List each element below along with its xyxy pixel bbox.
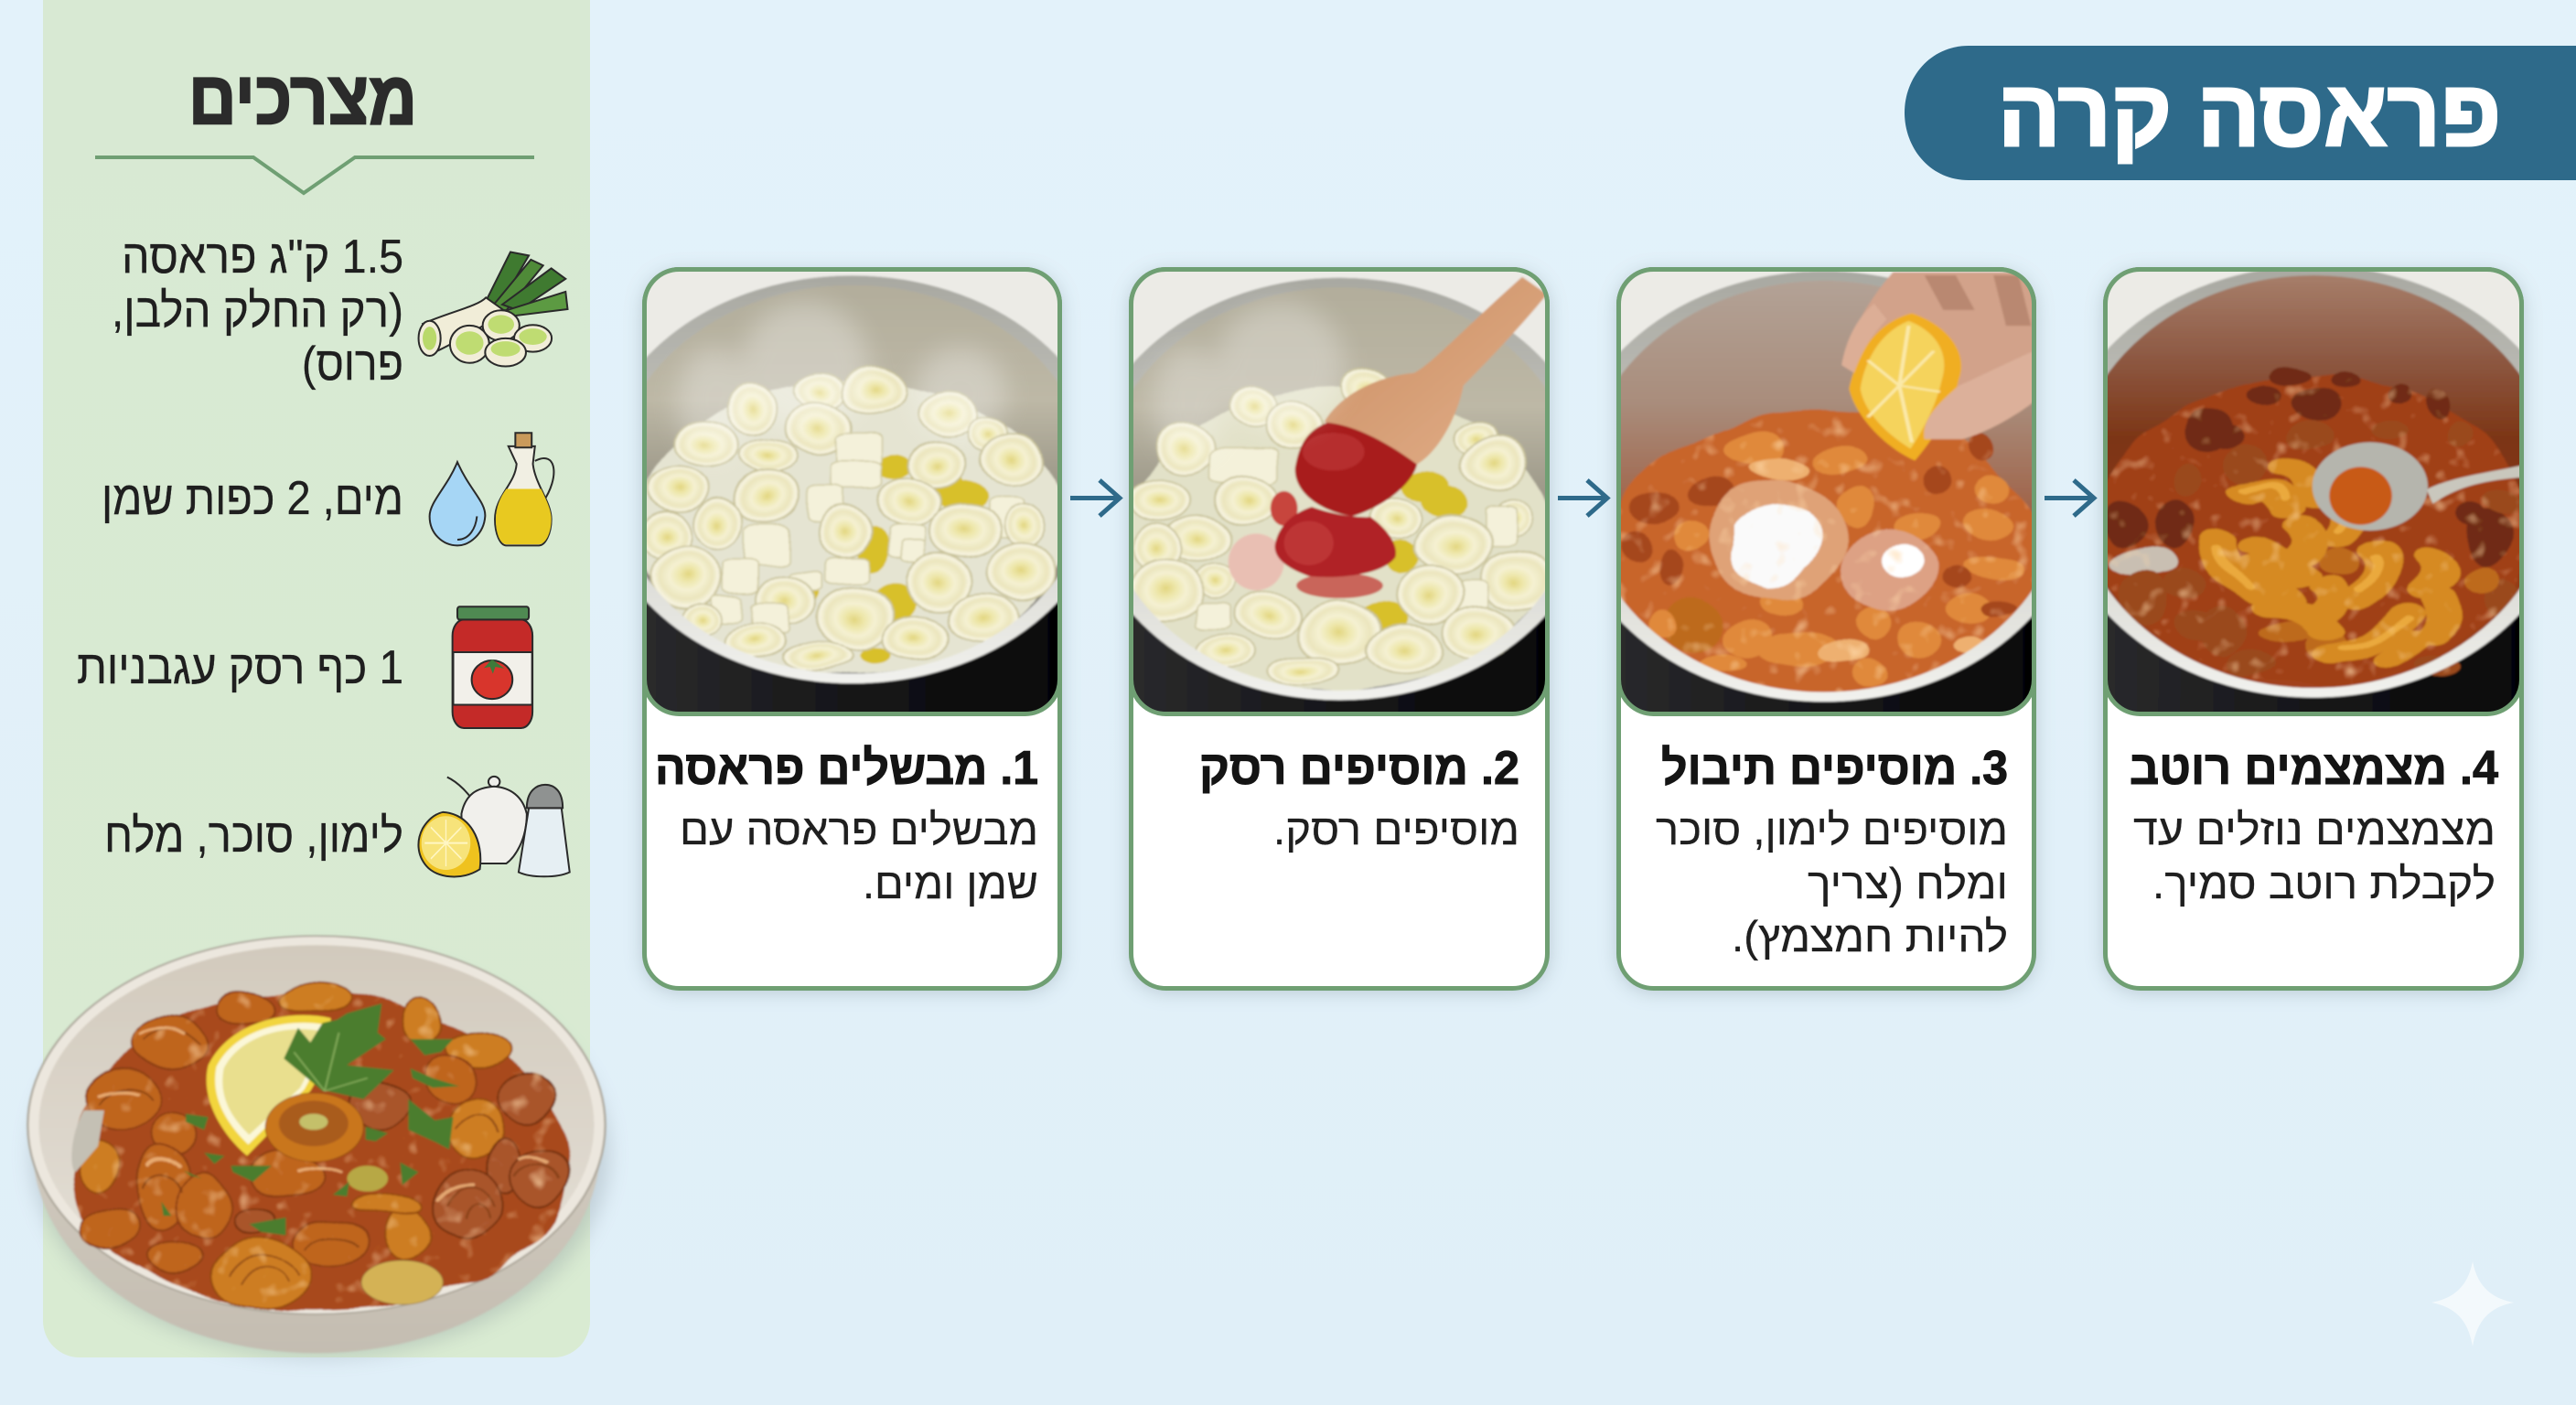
step 1 description: שמן ומים. bbox=[863, 859, 1038, 907]
step 4 description bbox=[2133, 805, 2496, 907]
step card 4 bbox=[2097, 263, 2530, 1000]
photo: boiling leek in pot bbox=[647, 272, 1057, 712]
step 1 description: מבשלים פראסה עם bbox=[680, 805, 1038, 853]
text: lemon, sugar, salt: לימון, סוכר, מלח bbox=[104, 810, 403, 863]
step 1 description bbox=[680, 805, 1038, 907]
arrow: step 3 to 4 bbox=[2045, 480, 2094, 516]
arrow: step 2 to 3 bbox=[1558, 480, 1607, 516]
arrow: step 1 to 2 bbox=[1070, 480, 1120, 516]
heading divider with chevron bbox=[95, 157, 534, 193]
step 3 description: ומלח (צריך bbox=[1808, 859, 2008, 907]
icon: water drop bbox=[430, 462, 485, 545]
title banner bbox=[1905, 46, 2576, 180]
photo: reducing the sauce with a metal spoon bbox=[2108, 272, 2519, 712]
icon: sparkle watermark bbox=[2431, 1261, 2514, 1346]
text: leek amount bbox=[112, 231, 403, 391]
step 3 title: 3. מוסיפים תיבול bbox=[1661, 742, 2008, 795]
text: leek amount: (רק החלק הלבן, bbox=[112, 284, 403, 338]
step 4 title: 4. מצמצמים רוטב bbox=[2130, 742, 2498, 795]
step 3 description: להיות חמצמץ). bbox=[1732, 912, 2008, 960]
step card 3 bbox=[1610, 263, 2044, 1000]
step 3 description bbox=[1656, 805, 2008, 960]
icon: oil bottle bbox=[495, 433, 553, 545]
photo: squeezing lemon and adding sugar and salt bbox=[1621, 272, 2032, 712]
icon: lemon, sugar bowl and salt shaker bbox=[418, 777, 570, 876]
step 4 description: לקבלת רוטב סמיך. bbox=[2152, 859, 2496, 907]
heading: ingredients: מצרכים bbox=[188, 57, 417, 140]
step 2 description: מוסיפים רסק. bbox=[1273, 805, 1519, 853]
text: leek amount: 1.5 ק"ג פראסה bbox=[122, 231, 403, 284]
title: פראסה קרה bbox=[1998, 61, 2501, 166]
step card 1 bbox=[635, 263, 1068, 1000]
icon: tomato paste jar bbox=[453, 606, 532, 728]
icon: leek bbox=[419, 252, 567, 367]
photo: adding tomato paste with wooden spoon bbox=[1133, 272, 1545, 712]
step 1 title: 1. מבשלים פראסה bbox=[655, 742, 1038, 795]
step 3 description: מוסיפים לימון, סוכר bbox=[1656, 805, 2008, 853]
text: tomato paste: 1 כף רסק עגבניות bbox=[77, 641, 403, 694]
illustration: finished dish in bowl bbox=[27, 936, 609, 1357]
step card 2 bbox=[1122, 263, 1557, 1000]
text: leek amount: פרוס) bbox=[302, 338, 403, 391]
text: water and oil: מים, 2 כפות שמן bbox=[102, 472, 403, 525]
step 4 description: מצמצמים נוזלים עד bbox=[2133, 805, 2496, 853]
step 2 title: 2. מוסיפים רסק bbox=[1199, 742, 1519, 795]
